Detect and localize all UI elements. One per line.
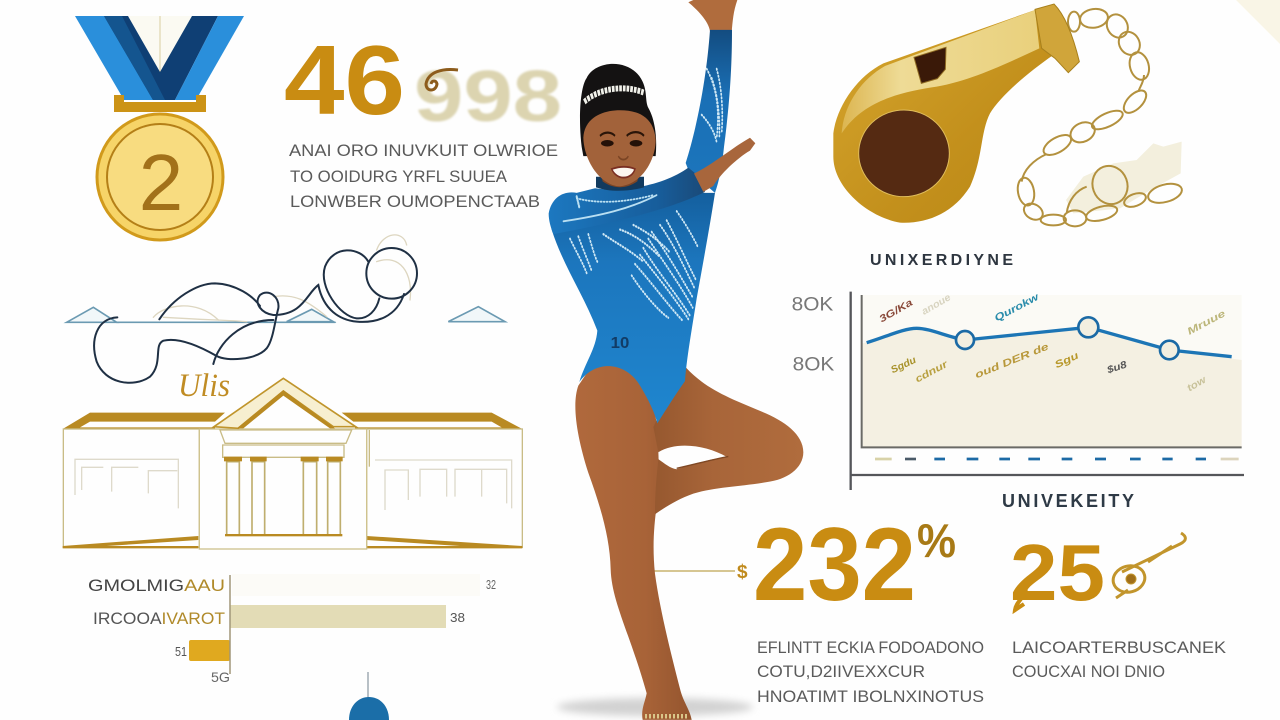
bar labels: GMOLMIG AAU [88,576,225,595]
whistle air slot [914,47,946,83]
text block: 25 caption: LAICOARTERBUSCANEK [1012,638,1227,657]
medal disc: 2 [139,138,183,227]
sleeve trim [563,195,657,221]
pale ghost curves [153,235,411,322]
leotard sparkle pattern [570,69,722,321]
columns [227,462,340,535]
bar chart: 38 [450,610,465,625]
faded digits: 998 [414,57,562,137]
bar chart: IRCOOAIVAROT [93,609,225,628]
rotated annotations: anoue [920,292,953,318]
leotard body [552,193,715,423]
raised leg [653,367,803,514]
text block: 232 caption: HNOATIMT IBOLNXINOTUS [757,687,984,706]
dash row [875,455,1239,463]
text block: 25 caption [1012,638,1227,681]
hair headband [584,88,644,102]
gold bar [189,640,230,661]
rotated annotations: Sgdu [889,355,918,376]
text block: intro copy [289,141,558,211]
decorative corner [1236,0,1280,44]
text block: 25 caption: COUCXAI NOI DNIO [1012,662,1165,681]
chart area [863,328,1242,447]
gold shoe detail [645,711,688,720]
y axis labels: 8OK [793,355,834,376]
number 46: 46 [284,25,405,135]
face [583,110,656,186]
wings [63,429,522,547]
stat: 25 with key [1010,528,1185,617]
rotated annotations: cdnur [914,359,951,385]
text block: intro copy: TO OOIDURG YRFL SUUEA [290,167,508,186]
stat: 232 percent [737,507,956,623]
rotated annotations: $u8 [1105,359,1129,377]
icon: blue pendant [349,672,389,720]
chart upper wash [863,295,1242,362]
nose [618,156,628,160]
connector line [652,570,735,572]
y axis labels: 8OK [792,295,833,316]
illustration: ribbon line over mountains [67,235,505,383]
mountains [67,307,505,322]
chain tassel [1066,142,1182,213]
y axis labels [792,295,834,376]
medal clasp [114,95,206,112]
leotard emblem: 10 [611,334,630,351]
whistle mouthpiece [1035,4,1079,73]
stat: top number [284,25,562,137]
roof [63,413,522,429]
illustration: university building [63,378,522,549]
neck [600,170,640,187]
dollar prefix: $ [737,562,748,583]
rotated annotations: oud DER de [974,341,1051,381]
raised sleeve [686,30,732,193]
whistle body [833,10,1053,223]
chain [1016,7,1184,226]
smile [612,167,635,178]
data points [956,317,1179,359]
chart heading: UNIXERDIYNE [870,252,1013,269]
forearm and hand [694,138,755,192]
data line [867,327,1232,357]
beige bar [230,605,446,628]
script mark above building: Ulis [178,368,230,404]
collar [596,177,644,191]
rotated annotations: tow [1185,374,1209,394]
icon: whistle [833,4,1184,226]
icon: key swirl [1110,533,1185,598]
percent sign: % [917,514,956,567]
ground lines [63,536,198,548]
medal disc [97,114,223,240]
rotated annotations: Mruue [1186,308,1228,338]
column capitals [224,457,343,536]
pale bar [232,574,480,596]
line chart [792,291,1244,490]
number 25: 25 [1010,528,1105,617]
text block: 232 caption: COTU,D2IIVEXXCUR [757,662,925,681]
axis [229,575,231,674]
floor shadow [557,698,753,716]
pediment [214,378,356,457]
text block: intro copy: LONWBER OUMOPENCTAAB [290,192,540,211]
icon: medal [75,16,244,240]
text block: 232 caption: EFLINTT ECKIA FODOADONO [757,638,984,657]
rotated annotations: 3G/Ka [878,297,915,325]
raised hand [688,0,737,32]
bar chart: 51 [175,644,187,659]
rotated annotations: Sgu [1053,351,1081,371]
outer axes [851,292,1244,490]
eyes [600,132,644,146]
whistle top face [842,10,1039,133]
ribbon line [94,248,417,383]
text block: intro copy: ANAI ORO INUVKUIT OLWRIOE [289,141,558,160]
rotated annotations: Qurokw [993,291,1042,324]
bar chart: 5G [211,669,230,685]
rotated annotations [878,291,1228,394]
medal ribbon [75,16,244,100]
gymnast figure [549,0,803,720]
crossing sleeve [549,168,705,234]
text block: 232 caption [757,638,984,706]
central block [199,429,367,549]
bar chart: 32 [486,577,496,592]
curl glyph [426,70,458,90]
inner axes [862,295,1242,447]
hair [580,64,656,156]
windows [75,459,512,510]
number 232: 232 [753,507,916,623]
chart caption: UNIVEKEITY [1002,491,1134,511]
bar chart [88,574,496,685]
whistle sound hole [859,110,949,197]
number tail [1015,590,1026,610]
standing leg [575,353,692,720]
